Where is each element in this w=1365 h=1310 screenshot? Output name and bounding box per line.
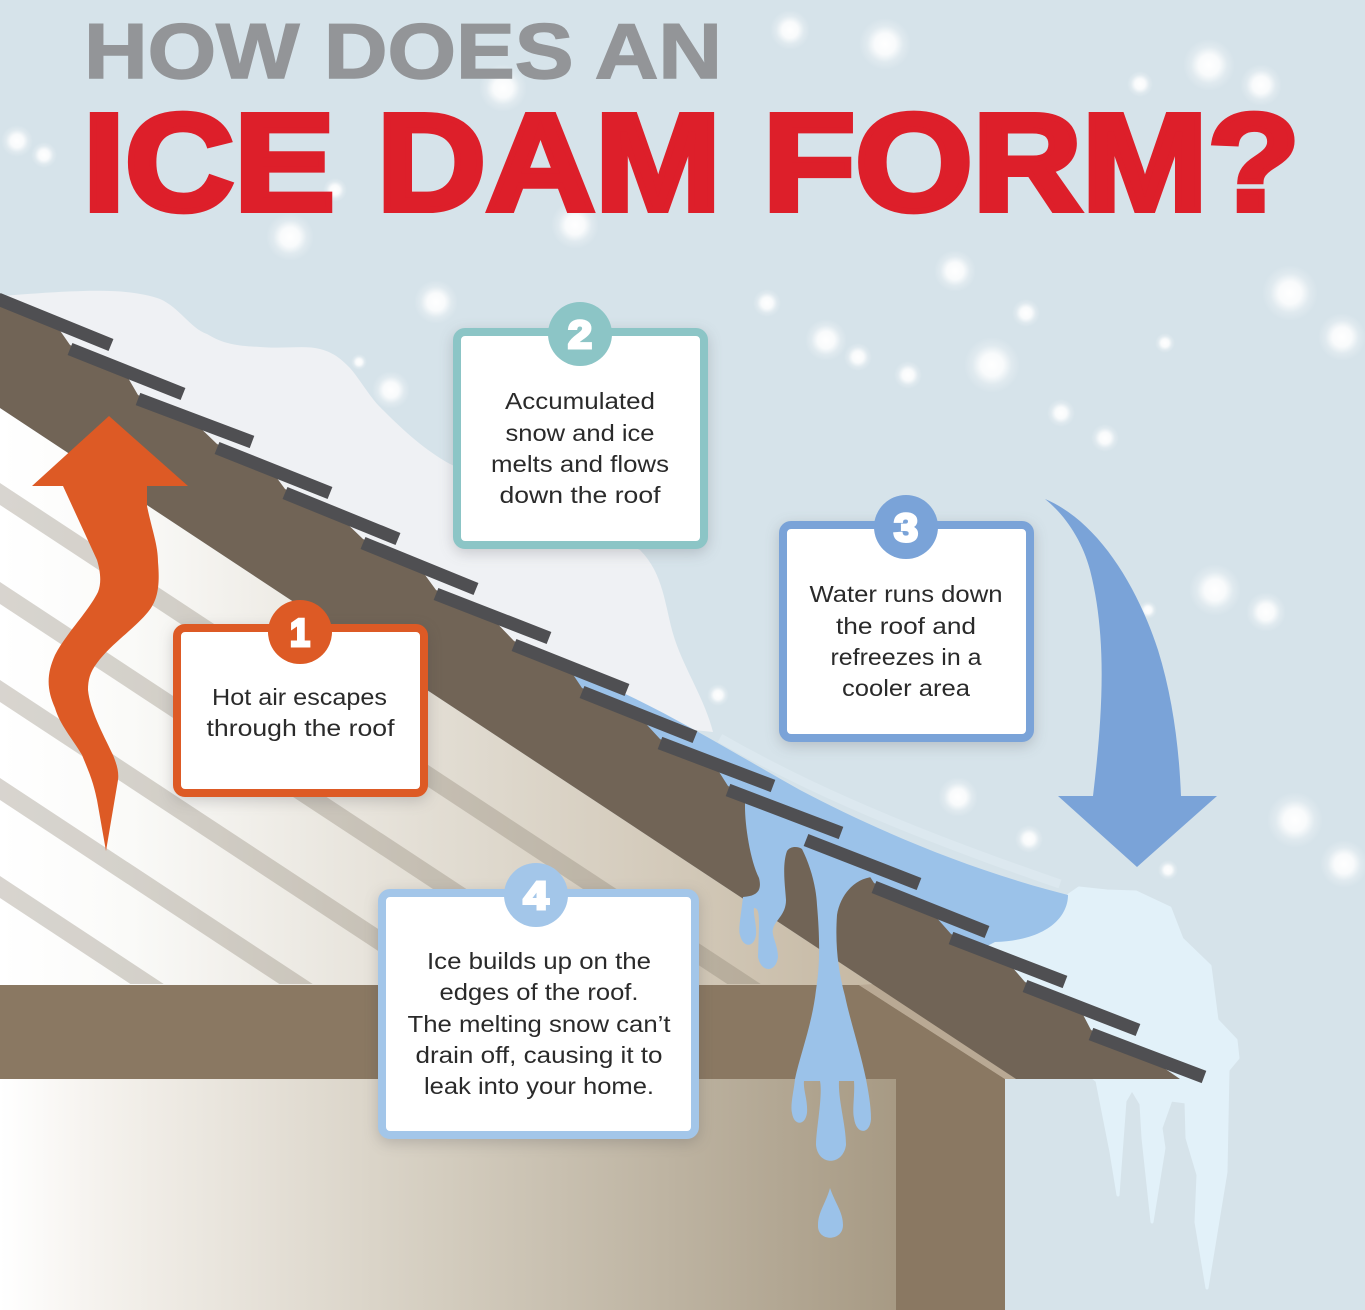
text 3: Water runs down [810, 581, 1002, 607]
siding stripes [0, 483, 785, 1022]
snow on roof [0, 291, 713, 732]
falling water drop [818, 1188, 843, 1238]
text 4: Ice builds up on the [427, 948, 651, 974]
number badge 4: 4 [524, 875, 549, 918]
soffit strip [859, 984, 1016, 1079]
number badge 4 [504, 863, 568, 927]
text 1 [206, 684, 395, 741]
number badge 3 [874, 495, 938, 559]
number badge 2: 2 [568, 314, 592, 357]
text 4: The melting snow can’t [408, 1011, 671, 1037]
number badge 3: 3 [894, 507, 918, 550]
text 3: the roof and [836, 613, 976, 639]
number badge 1: 1 [290, 612, 310, 655]
shingles [0, 299, 1204, 1077]
text 3: refreezes in a [830, 644, 982, 670]
lower wall [0, 1079, 896, 1310]
callout 3 [783, 495, 1030, 738]
callout 2 [457, 302, 704, 545]
snowflakes [1, 10, 1365, 888]
text 3 [810, 581, 1002, 701]
text 1: Hot air escapes [212, 684, 387, 710]
meltwater on roof [572, 672, 1068, 960]
text 4: edges of the roof. [440, 979, 638, 1005]
text 4: drain off, causing it to [416, 1042, 662, 1068]
water drips [739, 790, 900, 1161]
text 2: snow and ice [506, 420, 654, 446]
light band above meltwater [720, 738, 1060, 884]
blue water arrow [1045, 499, 1217, 867]
text 1: through the roof [206, 715, 395, 741]
number badge 1 [268, 600, 332, 664]
callout 1 [177, 600, 424, 793]
number badge 2 [548, 302, 612, 366]
text 2: down the roof [500, 482, 661, 508]
text 2: Accumulated [505, 388, 655, 414]
ice dam and icicles [985, 888, 1238, 1288]
callout 4 [382, 863, 695, 1135]
title line 2: ICE DAM FORM? [83, 86, 1300, 240]
text 2: melts and flows [491, 451, 669, 477]
text 4 [408, 948, 671, 1099]
orange hot air arrow [32, 416, 188, 851]
text 2 [491, 388, 669, 508]
text 4: leak into your home. [424, 1073, 654, 1099]
text 3: cooler area [842, 675, 971, 701]
roof [0, 302, 1180, 1079]
wood beam and column [0, 985, 1005, 1310]
title line 1: HOW DOES AN [84, 7, 722, 95]
wall under the gable [0, 408, 1016, 1079]
